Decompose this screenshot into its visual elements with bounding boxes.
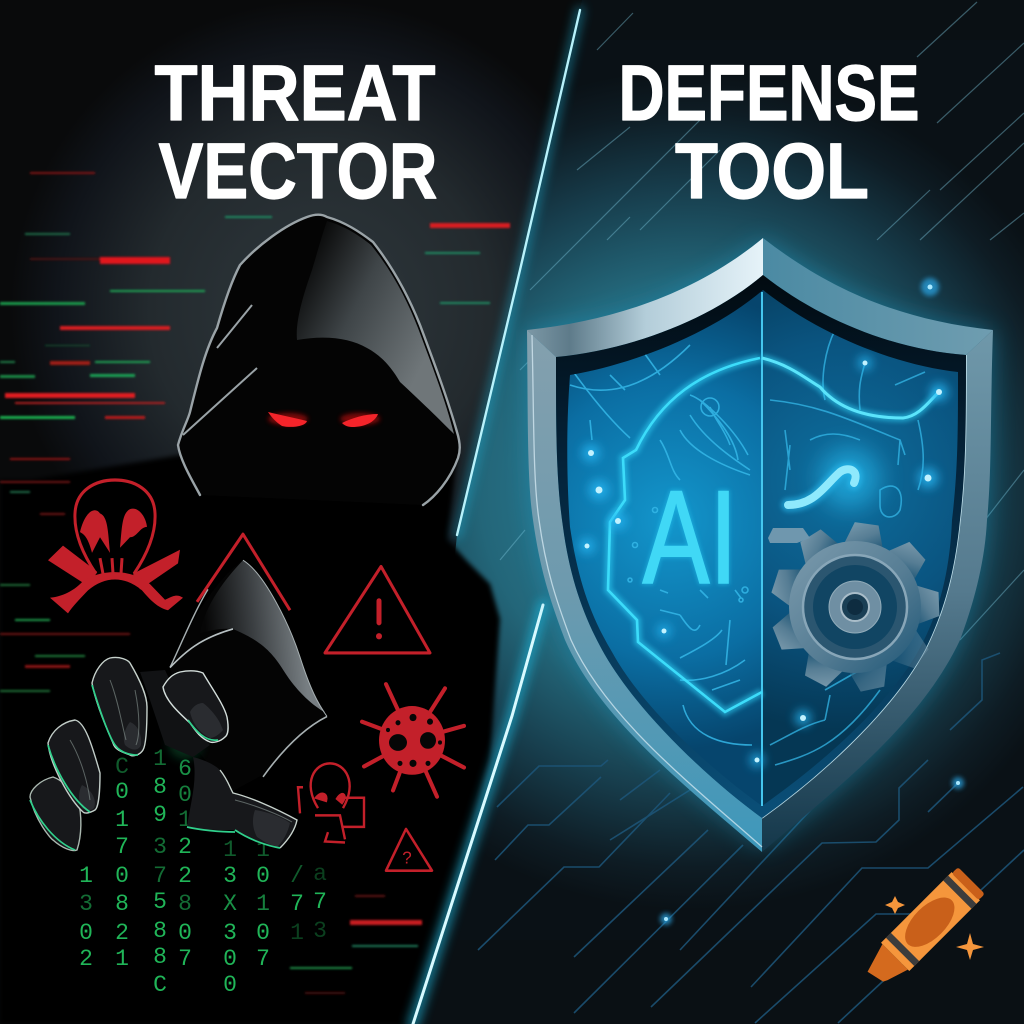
thumb nail [253, 810, 290, 847]
gear [758, 512, 952, 704]
hood fold left upper [217, 305, 252, 348]
glowing nodes [579, 356, 948, 767]
lower beam core [413, 605, 543, 1024]
matrix code digits: C [153, 972, 167, 998]
matrix code digits: 3 [79, 891, 93, 917]
AI label [642, 464, 738, 612]
sparkle large [956, 933, 984, 960]
icon: crayon logo [860, 866, 986, 992]
finger fold highlights [70, 680, 292, 822]
matrix code digits: 6 [178, 756, 192, 782]
matrix code digits: 2 [115, 920, 129, 946]
matrix code digits: 0 [115, 779, 129, 805]
blue panel left [567, 290, 763, 806]
heading line: tool: TOOL [675, 126, 869, 215]
small hood over hand [170, 560, 327, 793]
matrix code digits [79, 746, 327, 998]
matrix code digits: 1 [153, 746, 167, 772]
matrix code digits: 1 [79, 863, 93, 889]
matrix code digits: 7 [290, 891, 304, 917]
matrix code digits: 8 [178, 891, 192, 917]
matrix code digits: 1 [290, 920, 304, 946]
matrix code digits: 0 [223, 972, 237, 998]
matrix code digits: 9 [153, 802, 167, 828]
icon: question triangle [386, 829, 432, 871]
green edge highlights [30, 685, 280, 850]
matrix code digits: 5 [153, 889, 167, 915]
matrix code digits: 2 [178, 834, 192, 860]
knuckle bridge [140, 670, 210, 757]
matrix code digits: 0 [115, 863, 129, 889]
frame: top right bevel [763, 238, 993, 355]
matrix code digits: 0 [178, 920, 192, 946]
matrix code digits: 1 [256, 891, 270, 917]
lower beam glow [413, 605, 543, 1024]
shield [527, 238, 993, 852]
finger: pinky [30, 777, 81, 851]
shield outer glow [527, 238, 993, 848]
icon: large red triangle behind hand [197, 534, 290, 610]
upper beam core [457, 10, 580, 535]
hood rim outline [178, 215, 460, 505]
data streaks: red and green [0, 172, 510, 994]
icon: warning triangle [325, 566, 430, 653]
icon: virus [362, 684, 464, 797]
thumb [187, 757, 297, 848]
red threat icons [48, 480, 464, 871]
matrix code digits: 1 [178, 807, 192, 833]
matrix code digits: 3 [223, 863, 237, 889]
frame: top left bevel [527, 238, 763, 357]
matrix code digits: 2 [178, 863, 192, 889]
matrix code digits: 8 [115, 891, 129, 917]
hooded figure [178, 215, 460, 505]
right circuit lines [770, 330, 925, 765]
matrix code digits: 7 [178, 946, 192, 972]
right eye [342, 414, 378, 427]
sparkle small [885, 896, 905, 914]
matrix code digits: 8 [153, 944, 167, 970]
matrix code digits: 1 [115, 807, 129, 833]
eyes glow [268, 413, 380, 425]
blue panel right [762, 290, 958, 806]
matrix code digits: a [313, 861, 327, 887]
heading: defense tool [618, 48, 920, 215]
index nail [190, 703, 223, 738]
matrix code digits: 3 [313, 918, 327, 944]
shield centre seam [761, 292, 763, 806]
matrix code digits: 0 [178, 782, 192, 808]
left circuit cracks [570, 345, 752, 745]
icon: question triangle: ? [402, 847, 412, 867]
matrix code digits: 8 [153, 774, 167, 800]
brain circuit outline [608, 358, 939, 712]
icon: small skull computer [298, 763, 364, 843]
right curve core [762, 358, 939, 418]
divider glow line [413, 10, 580, 1024]
heading line: defense: DEFENSE [618, 48, 920, 137]
matrix code digits: 0 [256, 863, 270, 889]
gear fragment [768, 528, 810, 543]
AI text: AI [642, 464, 738, 612]
reaching hand [30, 657, 297, 851]
inner gap [556, 275, 966, 818]
finger: index [163, 671, 228, 742]
heading line: threat: THREAT [154, 48, 436, 137]
matrix code digits: 1 [115, 946, 129, 972]
frame inner bright line [762, 355, 966, 818]
frame: left side [527, 330, 762, 852]
finger: ring [48, 720, 100, 813]
left eye [268, 412, 307, 427]
figure silhouette and shoulders [0, 450, 500, 1024]
matrix code digits: 2 [79, 946, 93, 972]
middle nail [124, 722, 141, 750]
frame: right side [762, 330, 993, 852]
matrix code digits: 7 [153, 863, 167, 889]
AI glow: AI [642, 464, 738, 612]
matrix code digits: 7 [313, 889, 327, 915]
ring nail [79, 785, 95, 810]
upper beam glow [457, 10, 580, 535]
matrix code digits: 3 [153, 834, 167, 860]
background: blue defense side [418, 0, 1024, 1024]
frame highlights [532, 335, 762, 847]
thumb outline [220, 770, 297, 848]
brain outline core [608, 358, 762, 712]
icon: skull and crossbones [48, 480, 183, 613]
matrix code digits: / [290, 863, 304, 889]
heading: threat vector [154, 48, 438, 215]
hood fold left lower [183, 368, 257, 435]
matrix code digits: 1 [223, 837, 237, 863]
matrix code digits: 7 [115, 834, 129, 860]
heading line: vector: VECTOR [158, 126, 438, 215]
hood gray patch [297, 221, 454, 434]
matrix code digits: 0 [256, 920, 270, 946]
green glow under hand [169, 731, 201, 759]
glowing swoosh [788, 448, 880, 508]
matrix code digits: 8 [153, 918, 167, 944]
right curve glow [762, 358, 939, 418]
finger: middle [92, 657, 147, 756]
matrix code digits: C [115, 754, 129, 780]
brain outline glow [608, 358, 762, 712]
matrix code digits: 0 [223, 946, 237, 972]
matrix code digits: 3 [223, 920, 237, 946]
matrix code digits: X [223, 891, 237, 917]
matrix code digits: 1 [256, 837, 270, 863]
matrix code digits: 7 [256, 946, 270, 972]
crayon body [860, 866, 986, 992]
matrix code digits: 0 [79, 920, 93, 946]
hood [178, 215, 460, 505]
